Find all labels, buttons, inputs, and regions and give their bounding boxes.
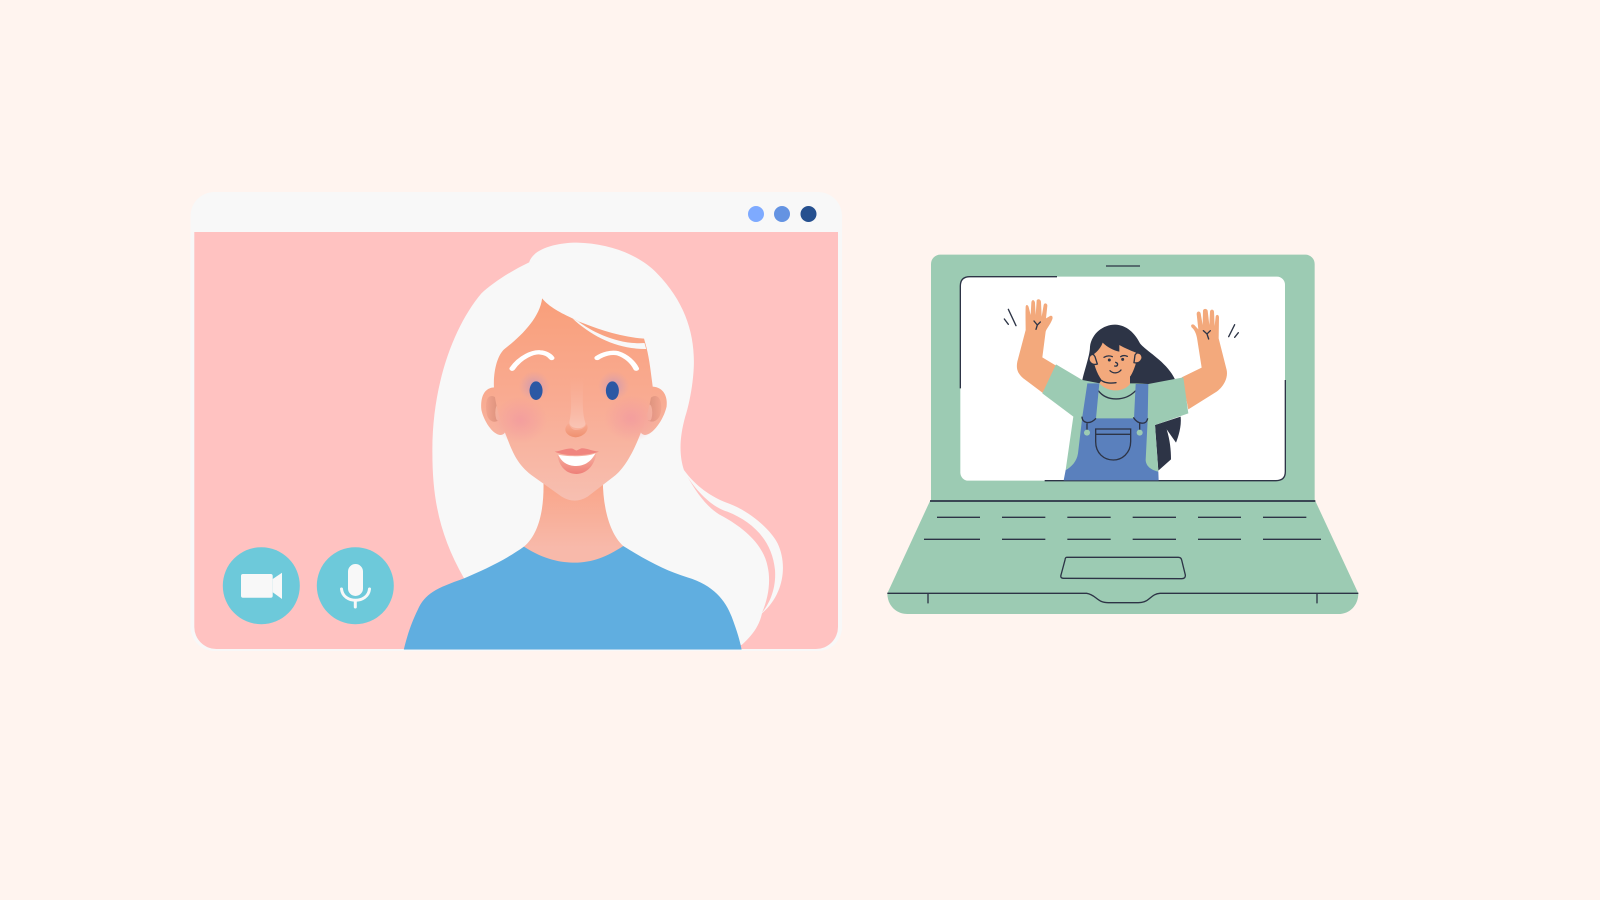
laptop: lid xyxy=(931,255,1315,502)
girl: lower hair xyxy=(1155,417,1181,471)
button: microphone xyxy=(317,547,394,624)
girl on screen xyxy=(1004,299,1238,480)
woman: white hair strand xyxy=(572,318,646,349)
girl: right arm and hand xyxy=(1182,309,1227,409)
woman: teeth xyxy=(558,453,595,466)
girl: shirt xyxy=(1042,364,1188,475)
video area background xyxy=(194,232,838,649)
woman: pink hair strand xyxy=(687,477,775,613)
woman: eyes xyxy=(530,381,619,400)
woman: eyebrows xyxy=(512,352,636,369)
girl: overalls pocket xyxy=(1096,429,1131,460)
girl: face features xyxy=(1102,356,1127,383)
woman: cheeks xyxy=(504,408,644,438)
window frame and title bar xyxy=(190,192,842,651)
button: camera xyxy=(223,547,300,624)
woman: neck xyxy=(524,484,623,563)
woman: right inner ear xyxy=(648,396,661,422)
window control dots xyxy=(748,206,816,222)
woman: left inner ear xyxy=(486,396,498,422)
woman: right ear xyxy=(641,387,667,435)
girl: palm lines and motion marks xyxy=(1004,309,1238,339)
laptop: keyboard keys xyxy=(924,517,1321,539)
laptop with waving girl xyxy=(887,255,1358,614)
girl: collar xyxy=(1098,391,1136,399)
woman: upper lip xyxy=(555,448,599,455)
laptop: webcam line xyxy=(1106,264,1140,268)
icon: microphone xyxy=(342,564,370,607)
girl: overalls xyxy=(1064,383,1159,480)
laptop: base xyxy=(887,501,1358,614)
laptop: screen xyxy=(960,277,1285,481)
woman on video call xyxy=(404,243,783,650)
laptop: hinge line xyxy=(930,498,1315,503)
woman: left ear xyxy=(481,387,505,435)
panel: video call window xyxy=(190,192,842,651)
laptop: front edge and notch xyxy=(887,593,1358,603)
woman: eye shadow glow xyxy=(523,375,626,396)
woman: nose xyxy=(566,399,588,438)
laptop: touchpad xyxy=(1061,557,1185,579)
woman: face xyxy=(494,298,653,501)
woman: lower lip xyxy=(557,454,596,474)
girl: neck and head xyxy=(1093,343,1138,390)
illustration canvas xyxy=(190,192,1358,651)
girl: overalls buckles xyxy=(1082,417,1148,436)
girl: ears xyxy=(1089,353,1142,364)
woman: hair xyxy=(432,243,783,645)
icon: video camera xyxy=(241,573,282,599)
laptop: screen outline accents xyxy=(960,277,1285,481)
girl: left arm and hand xyxy=(1017,299,1057,393)
woman: shirt xyxy=(404,546,742,650)
girl: back hair xyxy=(1082,325,1175,387)
